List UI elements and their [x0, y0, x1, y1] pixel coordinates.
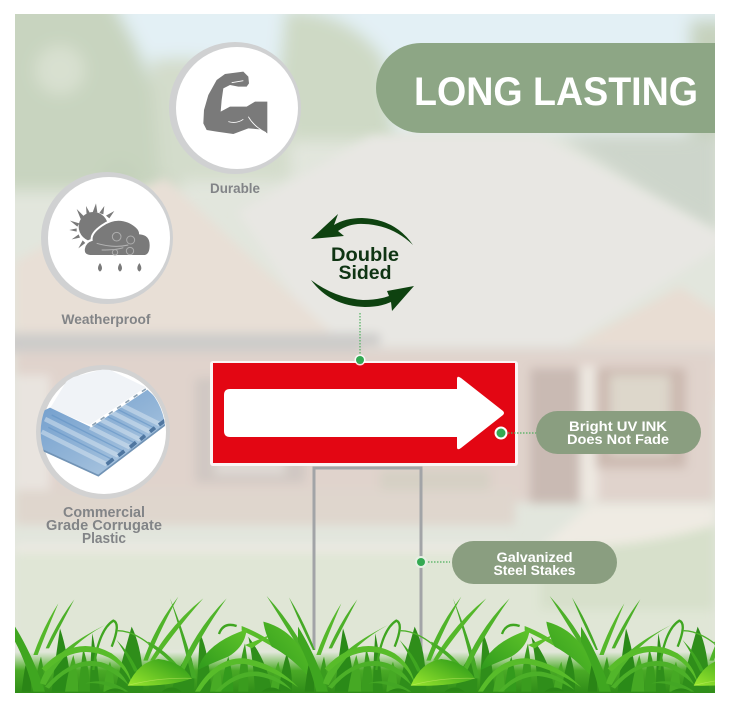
- marker: top of sign: [354, 354, 366, 366]
- callout: galvanized steel stakes: Steel Stakes: [494, 562, 576, 578]
- arrow on sign: [224, 377, 504, 449]
- callout: bright uv ink: Bright UV INK: [569, 418, 667, 434]
- panel: weatherproof badge: [41, 172, 173, 327]
- label: double sided: Double: [331, 245, 399, 266]
- label: double sided: Sided: [338, 263, 392, 284]
- label: commercial grade corrugate plastic: Plastic: [82, 531, 126, 547]
- label: weatherproof: Weatherproof: [62, 311, 151, 327]
- label: durable: Durable: [210, 180, 260, 196]
- stake: [314, 468, 421, 650]
- callout: bright uv ink: Does Not Fade: [567, 431, 669, 447]
- icon: flexed arm: [203, 72, 267, 134]
- sign: [210, 361, 518, 466]
- connector: double sided to sign: [359, 313, 361, 356]
- panel: corrugated plastic badge: [35, 365, 175, 547]
- heading: long lasting: LONG LASTING: [414, 70, 698, 114]
- callout: galvanized steel stakes: [415, 541, 617, 584]
- icon: double sided arrows: [311, 214, 414, 311]
- callout: bright uv ink: [494, 411, 701, 454]
- label: commercial grade corrugate plastic: Grade Corrugate: [46, 518, 162, 534]
- callout: galvanized steel stakes: Galvanized: [496, 549, 572, 565]
- icon: sun and cloud with rain: [69, 203, 151, 272]
- grass: [15, 596, 731, 693]
- panel: durable badge: [169, 42, 301, 196]
- icon: corrugated plastic sheets: [40, 370, 165, 477]
- label: commercial grade corrugate plastic: Commercial: [63, 505, 145, 521]
- label: double sided: [331, 245, 399, 284]
- label: commercial grade corrugate plastic: [46, 505, 162, 547]
- panel: long lasting banner: [376, 43, 715, 133]
